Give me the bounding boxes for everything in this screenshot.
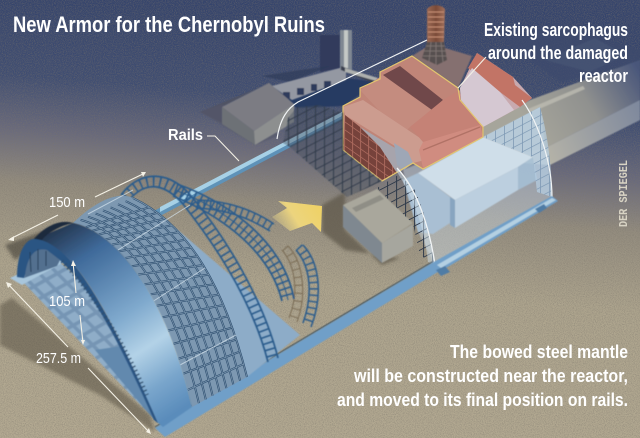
sarcophagus through the glass [460,53,532,127]
title: New Armor for the Chernobyl Ruins [13,12,325,37]
arc small [196,200,274,231]
ground shadow of shelter [0,298,155,432]
outline of shelter [277,40,427,139]
floor under the assembled shelter [10,212,300,423]
arc right [296,245,318,327]
shadow of front block [322,192,400,265]
yellow arrow [272,201,322,232]
front lattice of shelter [377,175,435,265]
right rail [155,196,558,437]
left rail [150,112,342,216]
dimension labels [36,194,85,367]
sarcophagus outline [343,56,483,181]
chimney [412,5,472,88]
caption [337,342,628,410]
dimension labels: 150 m [49,194,85,211]
dimension labels: 257.5 m [36,350,81,367]
freestanding arch segments [121,176,318,362]
white-blue reactor hall [403,107,552,265]
label: rails: Rails [168,127,203,144]
front grey block [343,189,413,263]
label: existing sarcophagus [484,20,628,86]
105 m arrow [73,262,83,343]
rear lattice of new shelter [283,105,382,197]
credit: DER SPIEGEL [617,160,631,227]
sarcophagus leader [458,57,486,88]
glass shell of new shelter (in place) [277,40,552,265]
left reactor building with walkway and tower [222,30,378,145]
label: existing sarcophagus: reactor [579,66,628,86]
arc large B [173,184,294,301]
257.5 m arrow [7,283,150,433]
150 m arrow [10,173,145,239]
long building to the right [483,60,640,165]
arc brown [282,246,303,322]
blue arch band [17,222,192,427]
sarcophagus [343,53,532,181]
arc A [121,176,278,362]
dimension labels: 105 m [49,293,85,310]
distant buildings and shadows [200,22,640,145]
assembled lattice section [73,190,247,407]
dimension arrows [6,57,486,434]
rails leader [207,136,239,161]
